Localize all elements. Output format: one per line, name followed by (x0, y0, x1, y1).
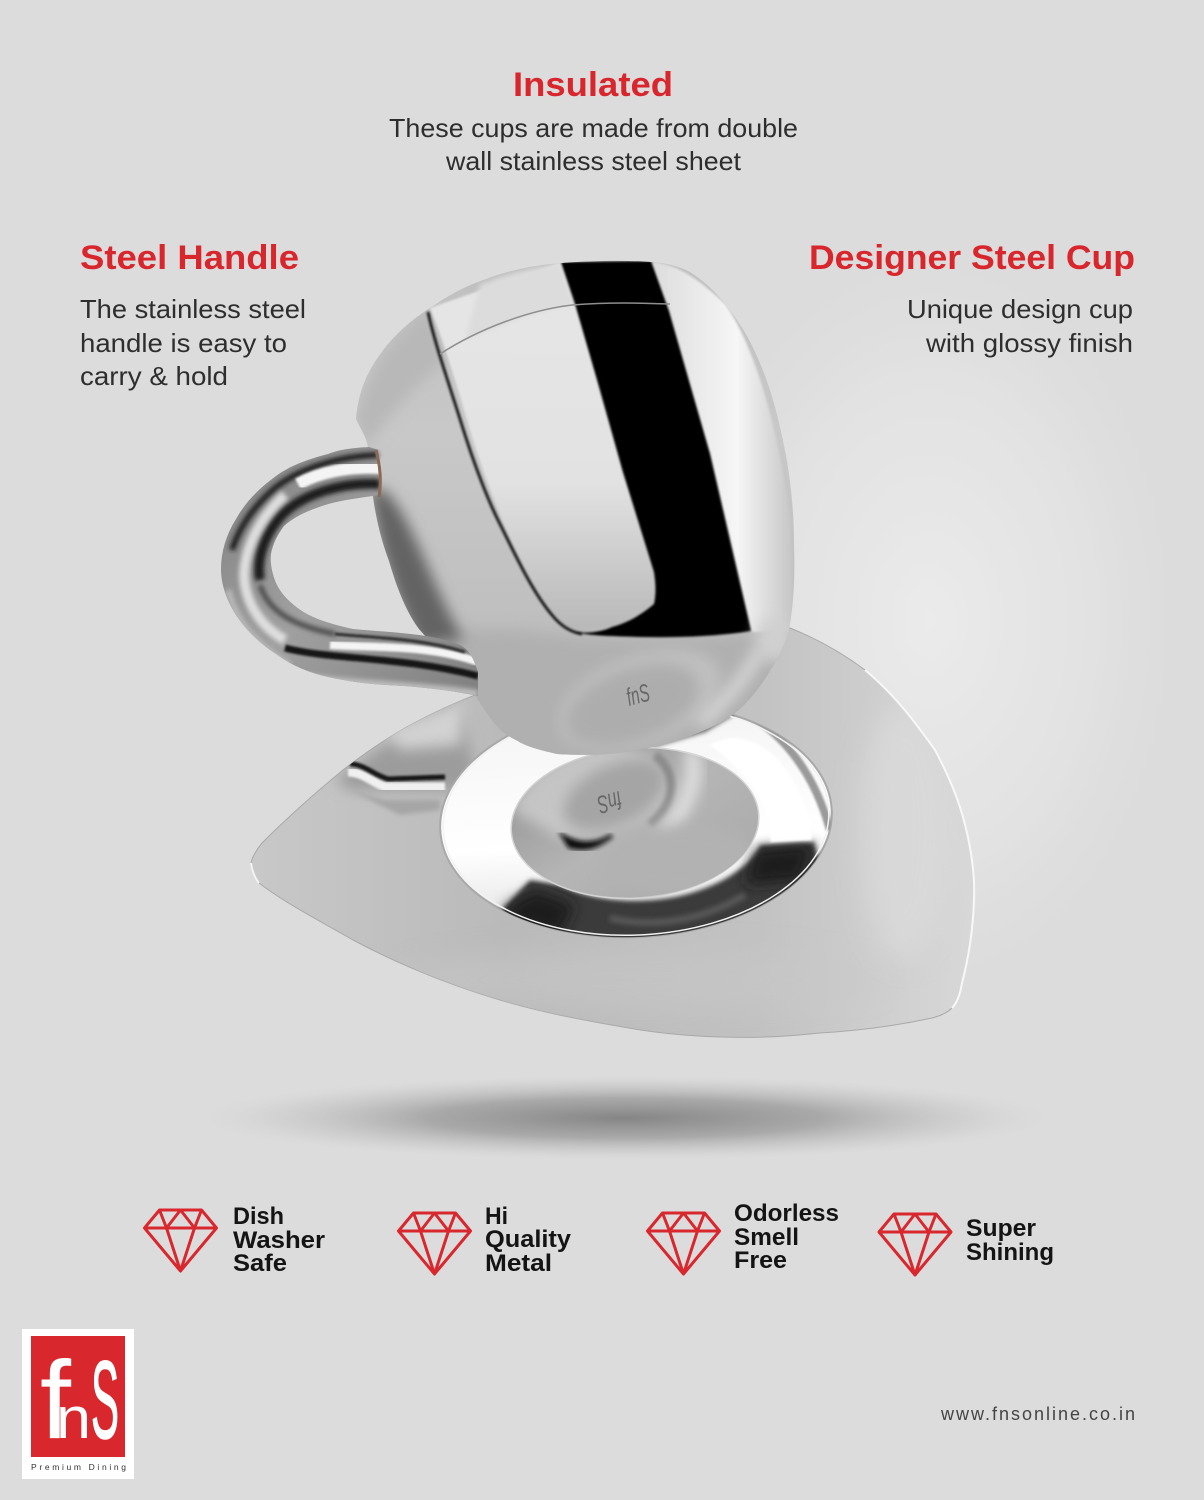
label: Dish (233, 1203, 284, 1230)
feature: Dish Washer Safe (144, 1203, 325, 1277)
saucer plate (251, 628, 974, 1037)
lighter patch on rim (470, 264, 569, 334)
saucer shading (335, 695, 950, 1010)
label: Super (966, 1215, 1036, 1242)
brand logo (22, 1329, 134, 1479)
rim seam (440, 303, 670, 354)
label: Quality (485, 1226, 572, 1253)
black stripe (561, 261, 751, 637)
saucer (251, 628, 974, 1037)
cup shading layers (356, 261, 800, 770)
ring reflections (497, 715, 831, 938)
label (966, 1215, 1054, 1266)
website url: www.fnsonline.co.in (940, 1404, 1135, 1424)
saucer inner disc (506, 740, 764, 906)
label (233, 1203, 325, 1277)
feature: Odorless Smell Free (648, 1200, 839, 1274)
label (734, 1200, 839, 1274)
logo tagline: Premium Dining (31, 1462, 126, 1472)
text block: Steel Handle description (80, 294, 306, 391)
bright streak right of base (700, 650, 760, 725)
right highlight (651, 262, 795, 632)
logo letters: f (40, 1339, 71, 1462)
logo red panel (31, 1336, 125, 1457)
cup handle (221, 447, 478, 696)
text block: Insulated description: wall stainless steel sheet (445, 146, 742, 176)
handle reflections (228, 455, 478, 694)
floor shadow (185, 1074, 1065, 1162)
text block: Steel Handle description: The stainless steel (80, 294, 306, 324)
saucer bright edge (865, 670, 974, 1008)
label: Odorless (734, 1200, 839, 1227)
icon: diamond (144, 1210, 216, 1271)
top left rim shade (358, 321, 438, 440)
logo reflection in saucer: fnS (594, 785, 625, 819)
text block: Insulated description (389, 113, 798, 176)
icon: diamond (879, 1214, 951, 1275)
soft highlight at right of bowl (755, 618, 795, 662)
icon: diamond (648, 1213, 720, 1274)
label: Hi (485, 1203, 508, 1230)
feature: Hi Quality Metal (398, 1203, 572, 1277)
brand logo: S (91, 1339, 119, 1462)
cup body (356, 261, 800, 770)
cup logo engraving: fnS (623, 679, 653, 712)
handle weld joint (376, 450, 380, 497)
text block: Designer Steel Cup description: Unique design cup (907, 294, 1133, 324)
feature: Super Shining (879, 1214, 1054, 1275)
text block: Insulated description: These cups are made from double (389, 113, 798, 143)
text block: Steel Handle description: handle is easy to (80, 328, 287, 358)
label: Free (734, 1247, 787, 1274)
heading: Steel Handle: Steel Handle (80, 239, 299, 277)
logo letters (40, 1339, 119, 1462)
text block: Designer Steel Cup description (907, 294, 1133, 358)
label: Shining (966, 1239, 1054, 1266)
cup silhouette (356, 261, 794, 755)
logo letters: n (56, 1386, 91, 1451)
label: Safe (233, 1250, 287, 1277)
dark left reflection (370, 488, 464, 645)
bright panel (430, 263, 650, 570)
logo card (22, 1329, 134, 1479)
heading: Designer Steel Cup: Designer Steel Cup (809, 239, 1135, 277)
disc reflections (510, 745, 760, 895)
text block: Designer Steel Cup description: with glossy finish (925, 328, 1133, 358)
label: Metal (485, 1250, 552, 1277)
handle body (221, 447, 478, 696)
lower bowl (460, 634, 747, 755)
icon: diamond (398, 1213, 470, 1274)
label (485, 1203, 572, 1277)
well rim highlight (437, 695, 835, 945)
saucer well ring (434, 693, 838, 947)
label: Washer (233, 1227, 325, 1254)
thin dark contour (428, 312, 582, 634)
heading: Insulated: Insulated (513, 66, 673, 104)
text block: Steel Handle description: carry & hold (80, 361, 228, 391)
label: Smell (734, 1224, 799, 1251)
base ellipse (568, 650, 720, 732)
